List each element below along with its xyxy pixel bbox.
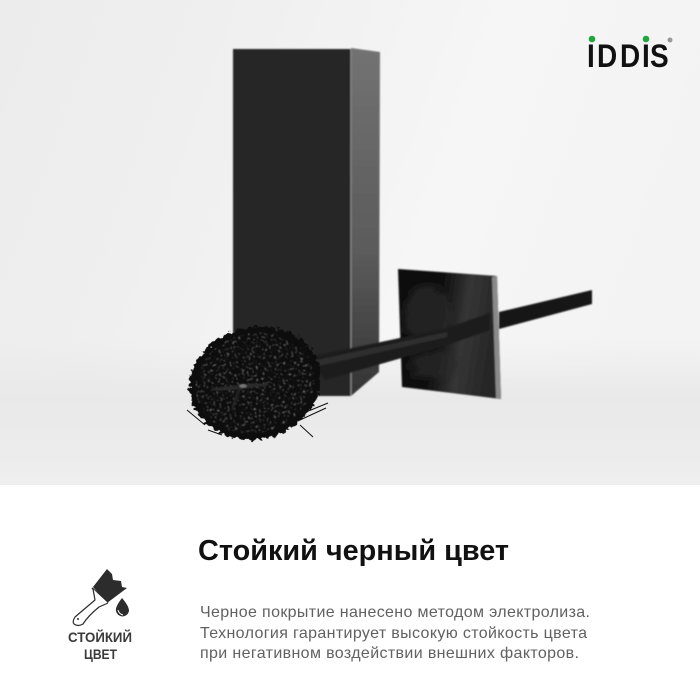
product: round black bristle head (177, 313, 333, 453)
body text: Черное покрытие нанесено методом электролиза. (200, 604, 590, 621)
product: square plate (398, 269, 501, 399)
icon label: СТОЙКИЙ (68, 630, 132, 645)
body text: при негативном воздействии внешних факторов. (200, 645, 579, 662)
body text (200, 604, 590, 662)
icon label (68, 630, 132, 662)
logo: IDDIS: IDDIS (587, 39, 669, 74)
heading: Стойкий черный цвет (198, 535, 509, 567)
icon: paint brush with drop (73, 569, 129, 626)
product: brush handle (310, 290, 592, 380)
body text: Технология гарантирует высокую стойкость цвета (200, 625, 587, 642)
product: black square holder (233, 48, 380, 396)
icon label: ЦВЕТ (84, 647, 118, 662)
bottom white panel (0, 485, 700, 700)
photo: product on light background (0, 0, 700, 485)
